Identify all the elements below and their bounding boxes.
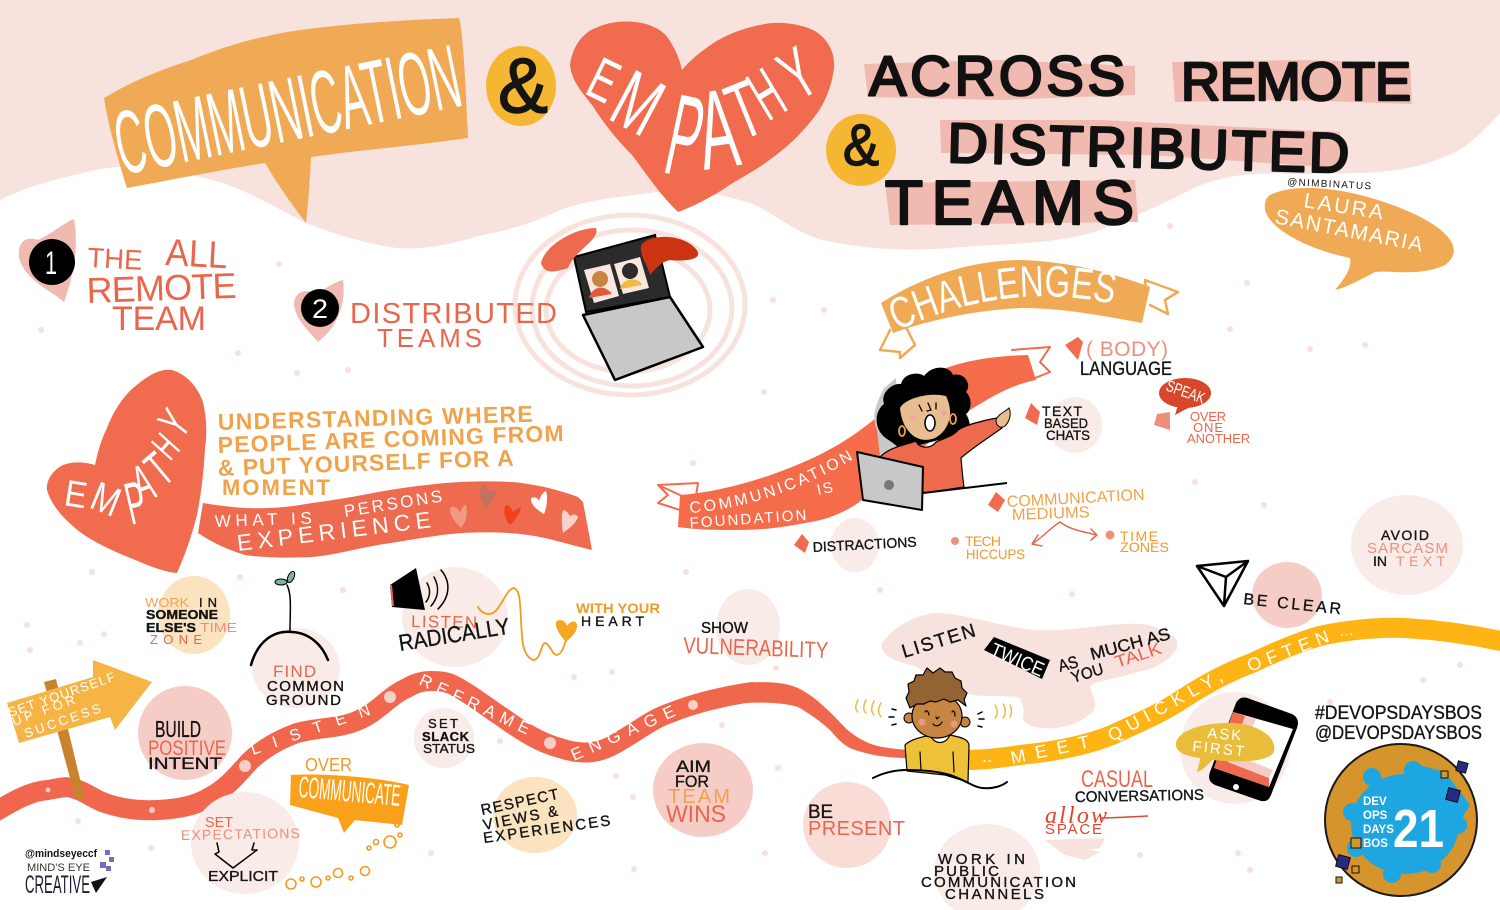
tip: work in someone else's time zone: TIME — [200, 620, 237, 635]
creator credit: mind's eye creative: @mindseyeccf — [25, 848, 97, 860]
hashtags: #DEVOPSDAYSBOS — [1315, 703, 1482, 724]
tip: work in someone else's time zone: IN — [199, 595, 217, 610]
title: across remote and distributed teams: DISTRIBUTED — [947, 111, 1350, 185]
logo: devopsdays boston 21: BOS — [1363, 838, 1388, 850]
challenge: communication mediums: TECH — [965, 533, 1001, 549]
header background wave — [0, 0, 1500, 250]
tip: listen radically with megaphone: WITH YOUR — [576, 600, 660, 616]
section 1: the all remote team: ALL — [165, 232, 229, 277]
tip: set expectations, explicit: SET — [205, 814, 233, 831]
yellow journey path: .. — [982, 746, 992, 766]
heart label EMPATHY, letter by letter: E — [62, 473, 90, 517]
icon: laptop video call — [515, 215, 745, 395]
title word EMPATHY, letter by letter: T — [714, 63, 775, 157]
tip: allow space — [1045, 803, 1148, 860]
challenge: speak over one another: SPEAK — [1164, 378, 1207, 408]
logo: devopsdays boston 21: OPS — [1363, 810, 1388, 822]
tip: work in public communication channels: PUBLIC — [934, 863, 999, 880]
heart label EMPATHY, letter by letter: M — [85, 472, 127, 525]
tip: listen radically with megaphone: HEART — [581, 613, 644, 629]
blob: listen twice as much as you talk: LISTEN — [899, 620, 978, 663]
heart label EMPATHY, letter by letter: T — [134, 442, 184, 496]
tip: avoid sarcasm in text: SARCASM — [1367, 540, 1448, 557]
word on path: REFRAME: REFRAME — [416, 670, 533, 738]
section 2: distributed teams: 2 — [312, 294, 328, 324]
creator credit: mind's eye creative — [25, 848, 114, 899]
definition of empathy: UNDERSTANDING WHERE — [217, 401, 533, 435]
ribbon: what is persons experience: EXPERIENCE — [235, 506, 432, 556]
tip: aim for team wins: WINS — [666, 801, 726, 828]
section 2: distributed teams: DISTRIBUTED — [350, 298, 557, 330]
tip: aim for team wins: TEAM — [668, 786, 730, 808]
tip: respect views and experiences: EXPERIENCES — [482, 812, 611, 847]
illustration: listening person — [856, 668, 1012, 788]
hashtags — [1315, 703, 1482, 744]
signpost: set yourself up for success: SUCCESS — [22, 701, 103, 741]
ribbon: what is persons experience — [198, 481, 592, 558]
blob: listen twice as much as you talk — [882, 613, 1178, 728]
tip: build positive intent: INTENT — [148, 754, 222, 773]
tip: show vulnerability — [683, 589, 829, 665]
ribbon: communication is foundation: FOUNDATION — [689, 507, 807, 532]
tip: avoid sarcasm in text: IN — [1373, 553, 1387, 569]
tip: set slack status: SET — [428, 716, 458, 731]
tip: work in someone else's time zone — [145, 576, 237, 654]
challenge: body language: ( BODY) — [1086, 338, 1168, 361]
signpost: set yourself up for success: UP FOR — [10, 692, 77, 729]
blob: listen twice as much as you talk: AS — [1056, 652, 1080, 676]
challenge: communication mediums: ZONES — [1120, 539, 1169, 555]
ribbon: communication is foundation — [657, 346, 1051, 532]
tip: allow space: allow — [1045, 803, 1107, 829]
challenge: speak over one another: OVER — [1190, 409, 1226, 424]
challenge: text based chats — [1025, 397, 1102, 453]
tip: respect views and experiences — [479, 777, 611, 853]
title speech bubble: Communication — [104, 18, 469, 223]
definition of empathy: & PUT YOURSELF FOR A — [217, 445, 514, 481]
blob: listen twice as much as you talk: YOU — [1069, 661, 1106, 687]
section 1: the all remote team: THE — [87, 242, 143, 276]
tip: over communicate — [254, 755, 409, 889]
tip: ask first with phone icon: FIRST — [1192, 738, 1245, 760]
tip: build positive intent: POSITIVE — [148, 737, 226, 760]
tip: casual conversations — [1075, 766, 1204, 806]
ribbon: what is persons experience: WHAT IS — [214, 509, 312, 531]
tip: listen radically with megaphone — [390, 567, 660, 667]
heart label EMPATHY, letter by letter — [62, 401, 201, 537]
tip: find common ground with sprout: FIND — [273, 662, 316, 681]
tip: casual conversations: CASUAL — [1081, 766, 1153, 793]
challenge: speak over one another — [1154, 378, 1250, 446]
yellow journey path: ... — [1339, 622, 1354, 640]
title word EMPATHY, letter by letter: A — [690, 64, 746, 194]
tip: aim for team wins: AIM — [676, 757, 711, 776]
illustration: woman pointing with laptop — [857, 368, 1010, 510]
challenge: text based chats: BASED — [1044, 415, 1088, 431]
word on path: MEET: MEET — [1009, 732, 1091, 768]
logo: devopsdays boston 21: 21 — [1393, 799, 1444, 859]
challenge: speak over one another: ANOTHER — [1187, 431, 1250, 446]
challenge: communication mediums — [951, 487, 1169, 562]
tip: aim for team wins: FOR — [675, 772, 709, 791]
speaker bubble: Laura Santamaria: SANTAMARIA — [1273, 205, 1425, 257]
challenge: text based chats: CHATS — [1046, 427, 1090, 443]
challenge: distractions — [794, 518, 917, 572]
title: across remote and distributed teams: TEAMS — [885, 169, 1134, 238]
tip: work in someone else's time zone: WORK — [145, 595, 189, 610]
tip: set expectations, explicit: EXPECTATIONS — [181, 825, 300, 843]
definition of empathy: MOMENT — [222, 475, 331, 500]
challenge: text based chats: TEXT — [1042, 403, 1082, 419]
challenge: speak over one another: ONE — [1193, 420, 1223, 435]
challenge: distractions: DISTRACTIONS — [812, 534, 917, 555]
challenge: communication mediums: HICCUPS — [966, 546, 1025, 562]
tip: show vulnerability: SHOW — [701, 620, 749, 637]
ampersand in yellow circle: & — [498, 41, 548, 129]
tip: be present — [803, 782, 905, 868]
blob: listen twice as much as you talk: TALK — [1112, 639, 1165, 672]
tip: work in someone else's time zone: SOMEONE — [146, 607, 218, 622]
tip: build positive intent: BUILD — [155, 716, 201, 742]
title word EMPATHY, letter by letter: P — [656, 69, 715, 203]
blob: listen twice as much as you talk: MUCH AS — [1088, 624, 1172, 664]
title: across remote and distributed teams: & — [843, 113, 879, 178]
title word EMPATHY, letter by letter — [577, 31, 831, 203]
tip: respect views and experiences: RESPECT — [479, 786, 560, 819]
title: across remote and distributed teams: REMOTE — [1181, 52, 1411, 112]
challenge: communication mediums: TIME — [1120, 528, 1158, 544]
challenges banner: CHALLENGES — [890, 266, 1116, 327]
tip: be present: BE — [808, 802, 833, 823]
tip: find common ground with sprout: GROUND — [266, 692, 341, 709]
title word EMPATHY, letter by letter: E — [577, 44, 630, 116]
tip: be clear with gem icon — [1197, 561, 1342, 628]
tip: ask first with phone icon — [1176, 692, 1298, 804]
word on path: LISTEN: LISTEN — [249, 702, 372, 759]
challenge: body language — [1065, 337, 1172, 380]
challenge: body language: LANGUAGE — [1080, 359, 1172, 380]
section 1: the all remote team: 1 — [45, 245, 57, 281]
tip: listen radically with megaphone: RADICALLY — [397, 613, 511, 656]
tip: work in public communication channels: WORK IN — [938, 851, 1025, 868]
ribbon: what is persons experience: PERSONS — [343, 487, 443, 521]
tip: set expectations, explicit: EXPLICIT — [208, 868, 278, 885]
tip: casual conversations: CONVERSATIONS — [1075, 787, 1204, 806]
section 1: the all remote team — [19, 219, 237, 338]
heart label EMPATHY, letter by letter: H — [143, 425, 188, 468]
tip: aim for team wins — [653, 743, 753, 837]
tip: build positive intent — [138, 686, 232, 780]
yellow journey path — [960, 622, 1500, 768]
definition of empathy — [217, 401, 564, 500]
heart label EMPATHY, letter by letter: A — [124, 452, 162, 513]
tip: work in someone else's time zone: ELSE'S — [146, 620, 196, 635]
tip: allow space: SPACE — [1045, 821, 1102, 838]
tip: over communicate: OVER — [305, 755, 352, 775]
logo: devopsdays boston 21: DEV — [1363, 796, 1387, 808]
word on path: QUICKLY: QUICKLY, — [1104, 666, 1226, 745]
section 2: distributed teams — [294, 280, 557, 353]
tip: respect views and experiences: VIEWS & — [482, 803, 559, 834]
coral journey path — [0, 670, 908, 813]
creator credit: mind's eye creative: MIND'S EYE — [27, 862, 90, 874]
heart label EMPATHY, letter by letter: P — [119, 467, 153, 537]
challenge: communication mediums: MEDIUMS — [1012, 504, 1090, 524]
tip: work in public communication channels — [921, 824, 1076, 910]
tip: set expectations, explicit — [181, 792, 300, 894]
blob: listen twice as much as you talk: TWICE — [987, 639, 1047, 681]
title word EMPATHY, letter by letter: Y — [764, 31, 831, 116]
signpost: set yourself up for success — [6, 660, 152, 800]
tip: show vulnerability: VULNERABILITY — [683, 632, 829, 663]
title word EMPATHY, letter by letter: H — [735, 53, 799, 136]
creator credit: mind's eye creative: CREATIVE — [25, 871, 90, 899]
scattered decorative dots — [24, 223, 1463, 873]
tip: work in public communication channels: CHANNELS — [945, 886, 1044, 903]
signpost: set yourself up for success: SET YOURSELF — [6, 669, 117, 720]
challenges banner — [878, 260, 1180, 360]
title: across remote and distributed teams — [826, 44, 1412, 238]
tip: work in public communication channels: COMMUNICATION — [921, 874, 1076, 891]
tip: avoid sarcasm in text — [1351, 495, 1463, 595]
section 1: the all remote team: REMOTE — [86, 265, 237, 311]
logo: devopsdays boston 21 — [1325, 744, 1477, 896]
definition of empathy: PEOPLE ARE COMING FROM — [217, 420, 564, 458]
tip: find common ground with sprout — [251, 570, 344, 709]
section 2: distributed teams: TEAMS — [377, 323, 482, 353]
section 1: the all remote team: TEAM — [112, 300, 206, 338]
title: across remote and distributed teams: ACROSS — [869, 44, 1125, 107]
ribbon: communication is foundation: COMMUNICATION — [690, 450, 852, 513]
speaker bubble: Laura Santamaria — [1265, 177, 1454, 290]
word on path: OFTEN: OFTEN — [1244, 626, 1332, 676]
tip: set slack status: STATUS — [423, 741, 475, 756]
title heart: Empathy — [570, 22, 834, 212]
tip: find common ground with sprout: COMMON — [267, 678, 344, 695]
tip: be present: PRESENT — [808, 818, 905, 840]
empathy heart — [47, 370, 206, 573]
speaker bubble: Laura Santamaria: LAURA — [1302, 189, 1385, 224]
tip: avoid sarcasm in text: TEXT — [1396, 553, 1445, 569]
title word EMPATHY, letter by letter: M — [598, 53, 678, 154]
infographic canvas: COMMUNICATE — [297, 771, 402, 813]
tip: ask first with phone icon: ASK — [1207, 725, 1242, 744]
hashtags: @DEVOPSDAYSBOS — [1315, 723, 1482, 744]
tip: be clear with gem icon: BE CLEAR — [1243, 591, 1342, 618]
tip: listen radically with megaphone: LISTEN — [411, 612, 477, 632]
word on path: ENGAGE: ENGAGE — [568, 702, 678, 765]
tip: set slack status: SLACK — [422, 729, 470, 744]
logo: devopsdays boston 21: DAYS — [1363, 824, 1394, 836]
speaker bubble: Laura Santamaria: @NIMBINATUS — [1287, 177, 1372, 192]
challenge: communication mediums: COMMUNICATION — [1006, 487, 1145, 511]
heart label EMPATHY, letter by letter: Y — [149, 401, 201, 447]
ribbon: communication is foundation: IS — [815, 479, 834, 499]
tip: work in someone else's time zone: ZONE — [150, 632, 202, 647]
tip: set slack status — [414, 708, 475, 768]
tip: avoid sarcasm in text: AVOID — [1381, 527, 1429, 543]
